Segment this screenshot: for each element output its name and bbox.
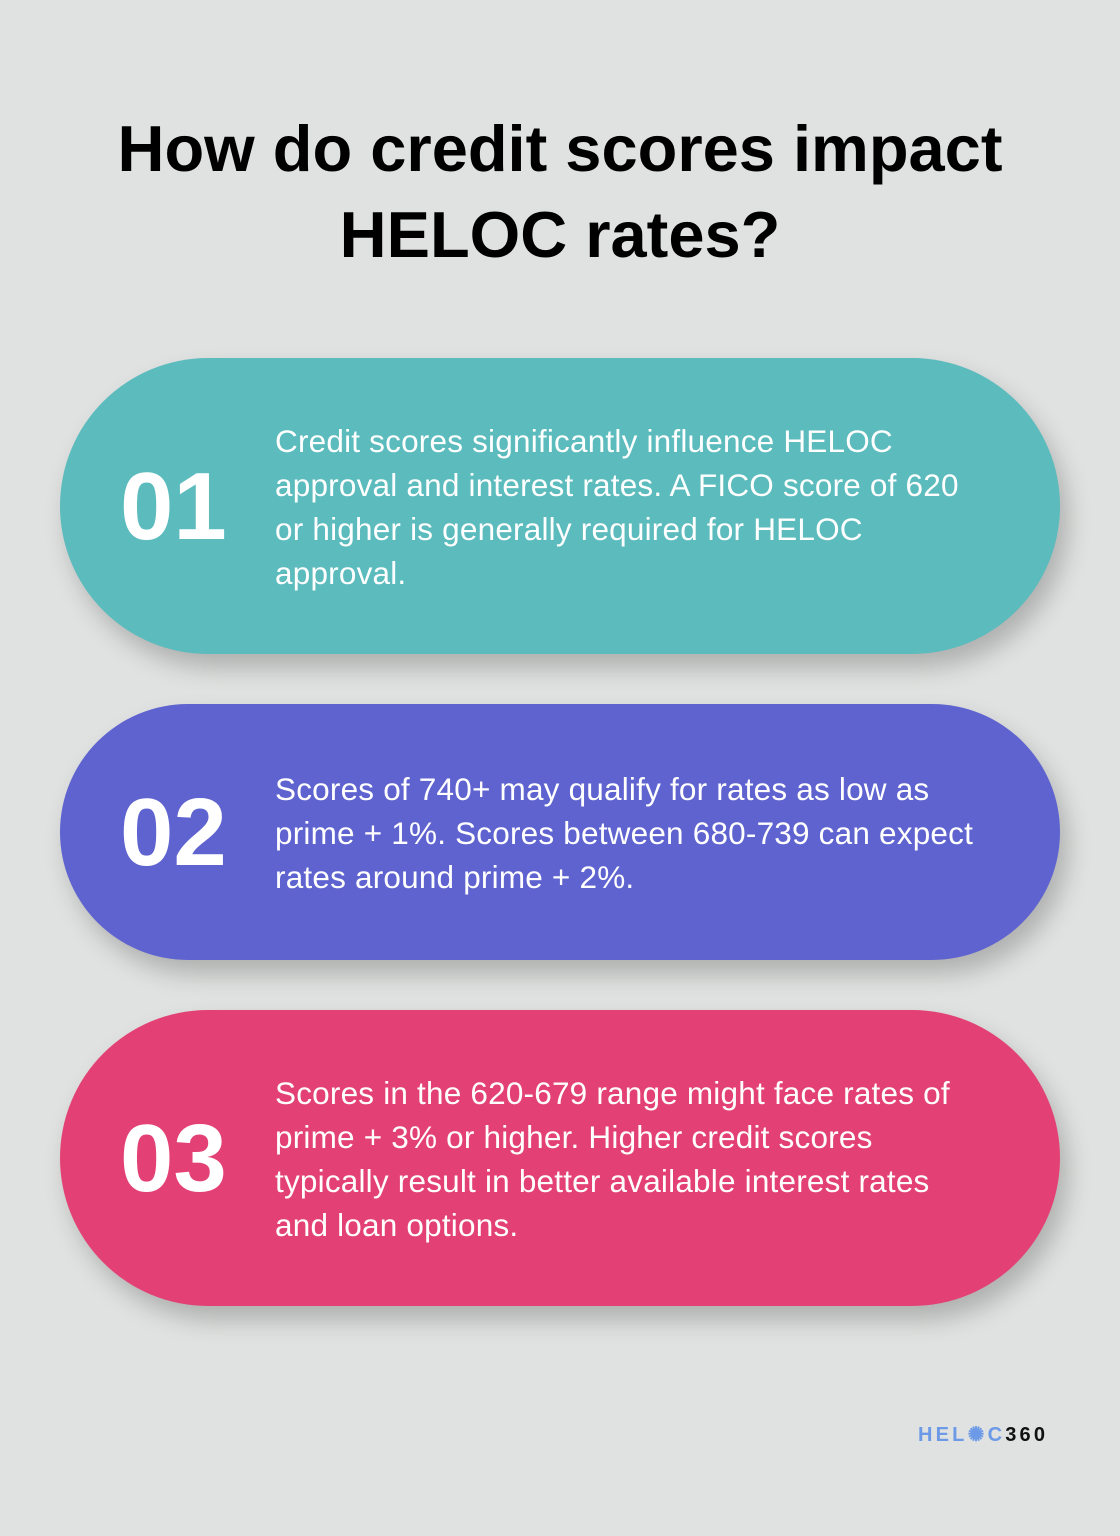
panel: card 03	[60, 1010, 1060, 1306]
title: HELOC rates?	[340, 198, 780, 271]
text 03: Scores in the 620-679 range might face rates of prime + 3% or higher. Higher credit scores typically result in better available interest rates and loan options.	[275, 1075, 950, 1243]
panel: card 02	[60, 704, 1060, 960]
number 02: 02	[120, 779, 227, 886]
text 02: Scores of 740+ may qualify for rates as low as prime + 1%. Scores between 680-739 can expect rates around prime + 2%.	[275, 771, 973, 895]
panel: card 01	[60, 358, 1060, 654]
title	[118, 112, 1002, 271]
number 01: 01	[120, 453, 227, 560]
title: How do credit scores impact	[118, 112, 1002, 185]
logo: HEL✺C360	[918, 1424, 1048, 1446]
text 01: Credit scores significantly influence HELOC approval and interest rates. A FICO score of 620 or higher is generally required for HELOC approval.	[275, 423, 959, 591]
number 03: 03	[120, 1105, 227, 1212]
